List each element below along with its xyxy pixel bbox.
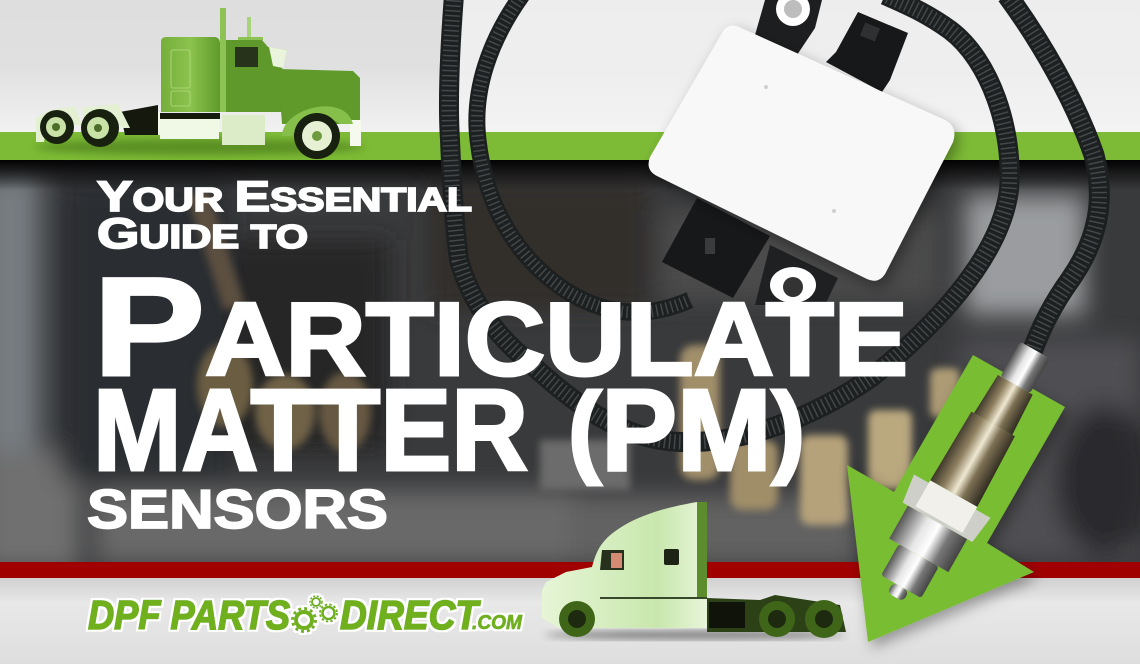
- heading: matter (pm): (: [568, 372, 601, 486]
- cable: inner left loop: [477, 0, 690, 312]
- heading: particulate: ARTICULATE: [205, 282, 908, 398]
- hex nut: [899, 475, 991, 544]
- sleeper window: [664, 549, 679, 565]
- sensor probe: [857, 328, 1073, 619]
- sensor mounting bracket: top: [755, 0, 822, 58]
- shield: [881, 544, 939, 598]
- heading: sensors: SENSORS: [87, 478, 388, 540]
- heading: matter (pm): [93, 365, 805, 495]
- heading: particulate: [93, 248, 908, 405]
- tip: [887, 582, 909, 602]
- heading: matter (pm): ): [772, 372, 805, 486]
- upper body: [974, 374, 1034, 435]
- heading: matter (pm): MATTER: [93, 365, 528, 495]
- truck: green conventional tractor: [35, 8, 365, 159]
- truck: pale green aerodynamic tractor: [542, 502, 846, 639]
- heading: your essential guide to: YOUR ESSENTIAL: [97, 173, 472, 221]
- red band: [0, 562, 1140, 578]
- heading: your essential guide to: [97, 173, 472, 258]
- wheels: [559, 600, 843, 638]
- frame line: [600, 597, 707, 599]
- chassis: [707, 595, 846, 632]
- arrow: green pointing down-left: [847, 355, 1065, 642]
- sleeper: [161, 37, 220, 112]
- chrome tank and step: [160, 119, 219, 139]
- heading: matter (pm): PM: [601, 365, 772, 495]
- green band: [0, 132, 1140, 160]
- hood: [278, 69, 360, 124]
- logo: DPF Parts Direct: DIRECT: [340, 592, 481, 638]
- front fender: [282, 106, 353, 136]
- lower body: [930, 411, 1017, 507]
- truck shadow: [35, 139, 365, 155]
- logo: DPF Parts Direct: .COM: [472, 612, 523, 634]
- heading: your essential guide to: G UIDE TO: [97, 210, 308, 258]
- icon: gears: [292, 596, 337, 632]
- connector: top: [826, 12, 908, 92]
- sensor mounting bracket: bottom: [755, 245, 838, 305]
- control module: white box: [649, 25, 954, 281]
- logo: DPF Parts Direct: [88, 592, 523, 638]
- rear frame and fenders: [120, 105, 158, 135]
- truck shadow: [545, 631, 845, 639]
- exhaust stacks: [220, 8, 226, 112]
- logo: DPF Parts Direct: DPF PARTS: [88, 592, 290, 638]
- cab window: [600, 550, 624, 570]
- heading: particulate: P: [93, 248, 205, 405]
- cab: [226, 40, 287, 112]
- wheels: [40, 109, 340, 159]
- background: workshop photo: [0, 160, 1140, 570]
- background: top light band: [0, 0, 1140, 134]
- top shadow under green band: [0, 160, 1140, 190]
- cab and sleeper: [542, 502, 707, 628]
- crimp: [1001, 342, 1050, 393]
- cable: large loop: [449, 0, 1010, 442]
- bumper: [350, 120, 361, 146]
- connector: bottom: [662, 198, 770, 298]
- cable: right lead to sensor: [1007, 0, 1099, 352]
- bottom light band: [0, 577, 1140, 664]
- rear fairing: [697, 502, 707, 598]
- thread: [889, 506, 967, 572]
